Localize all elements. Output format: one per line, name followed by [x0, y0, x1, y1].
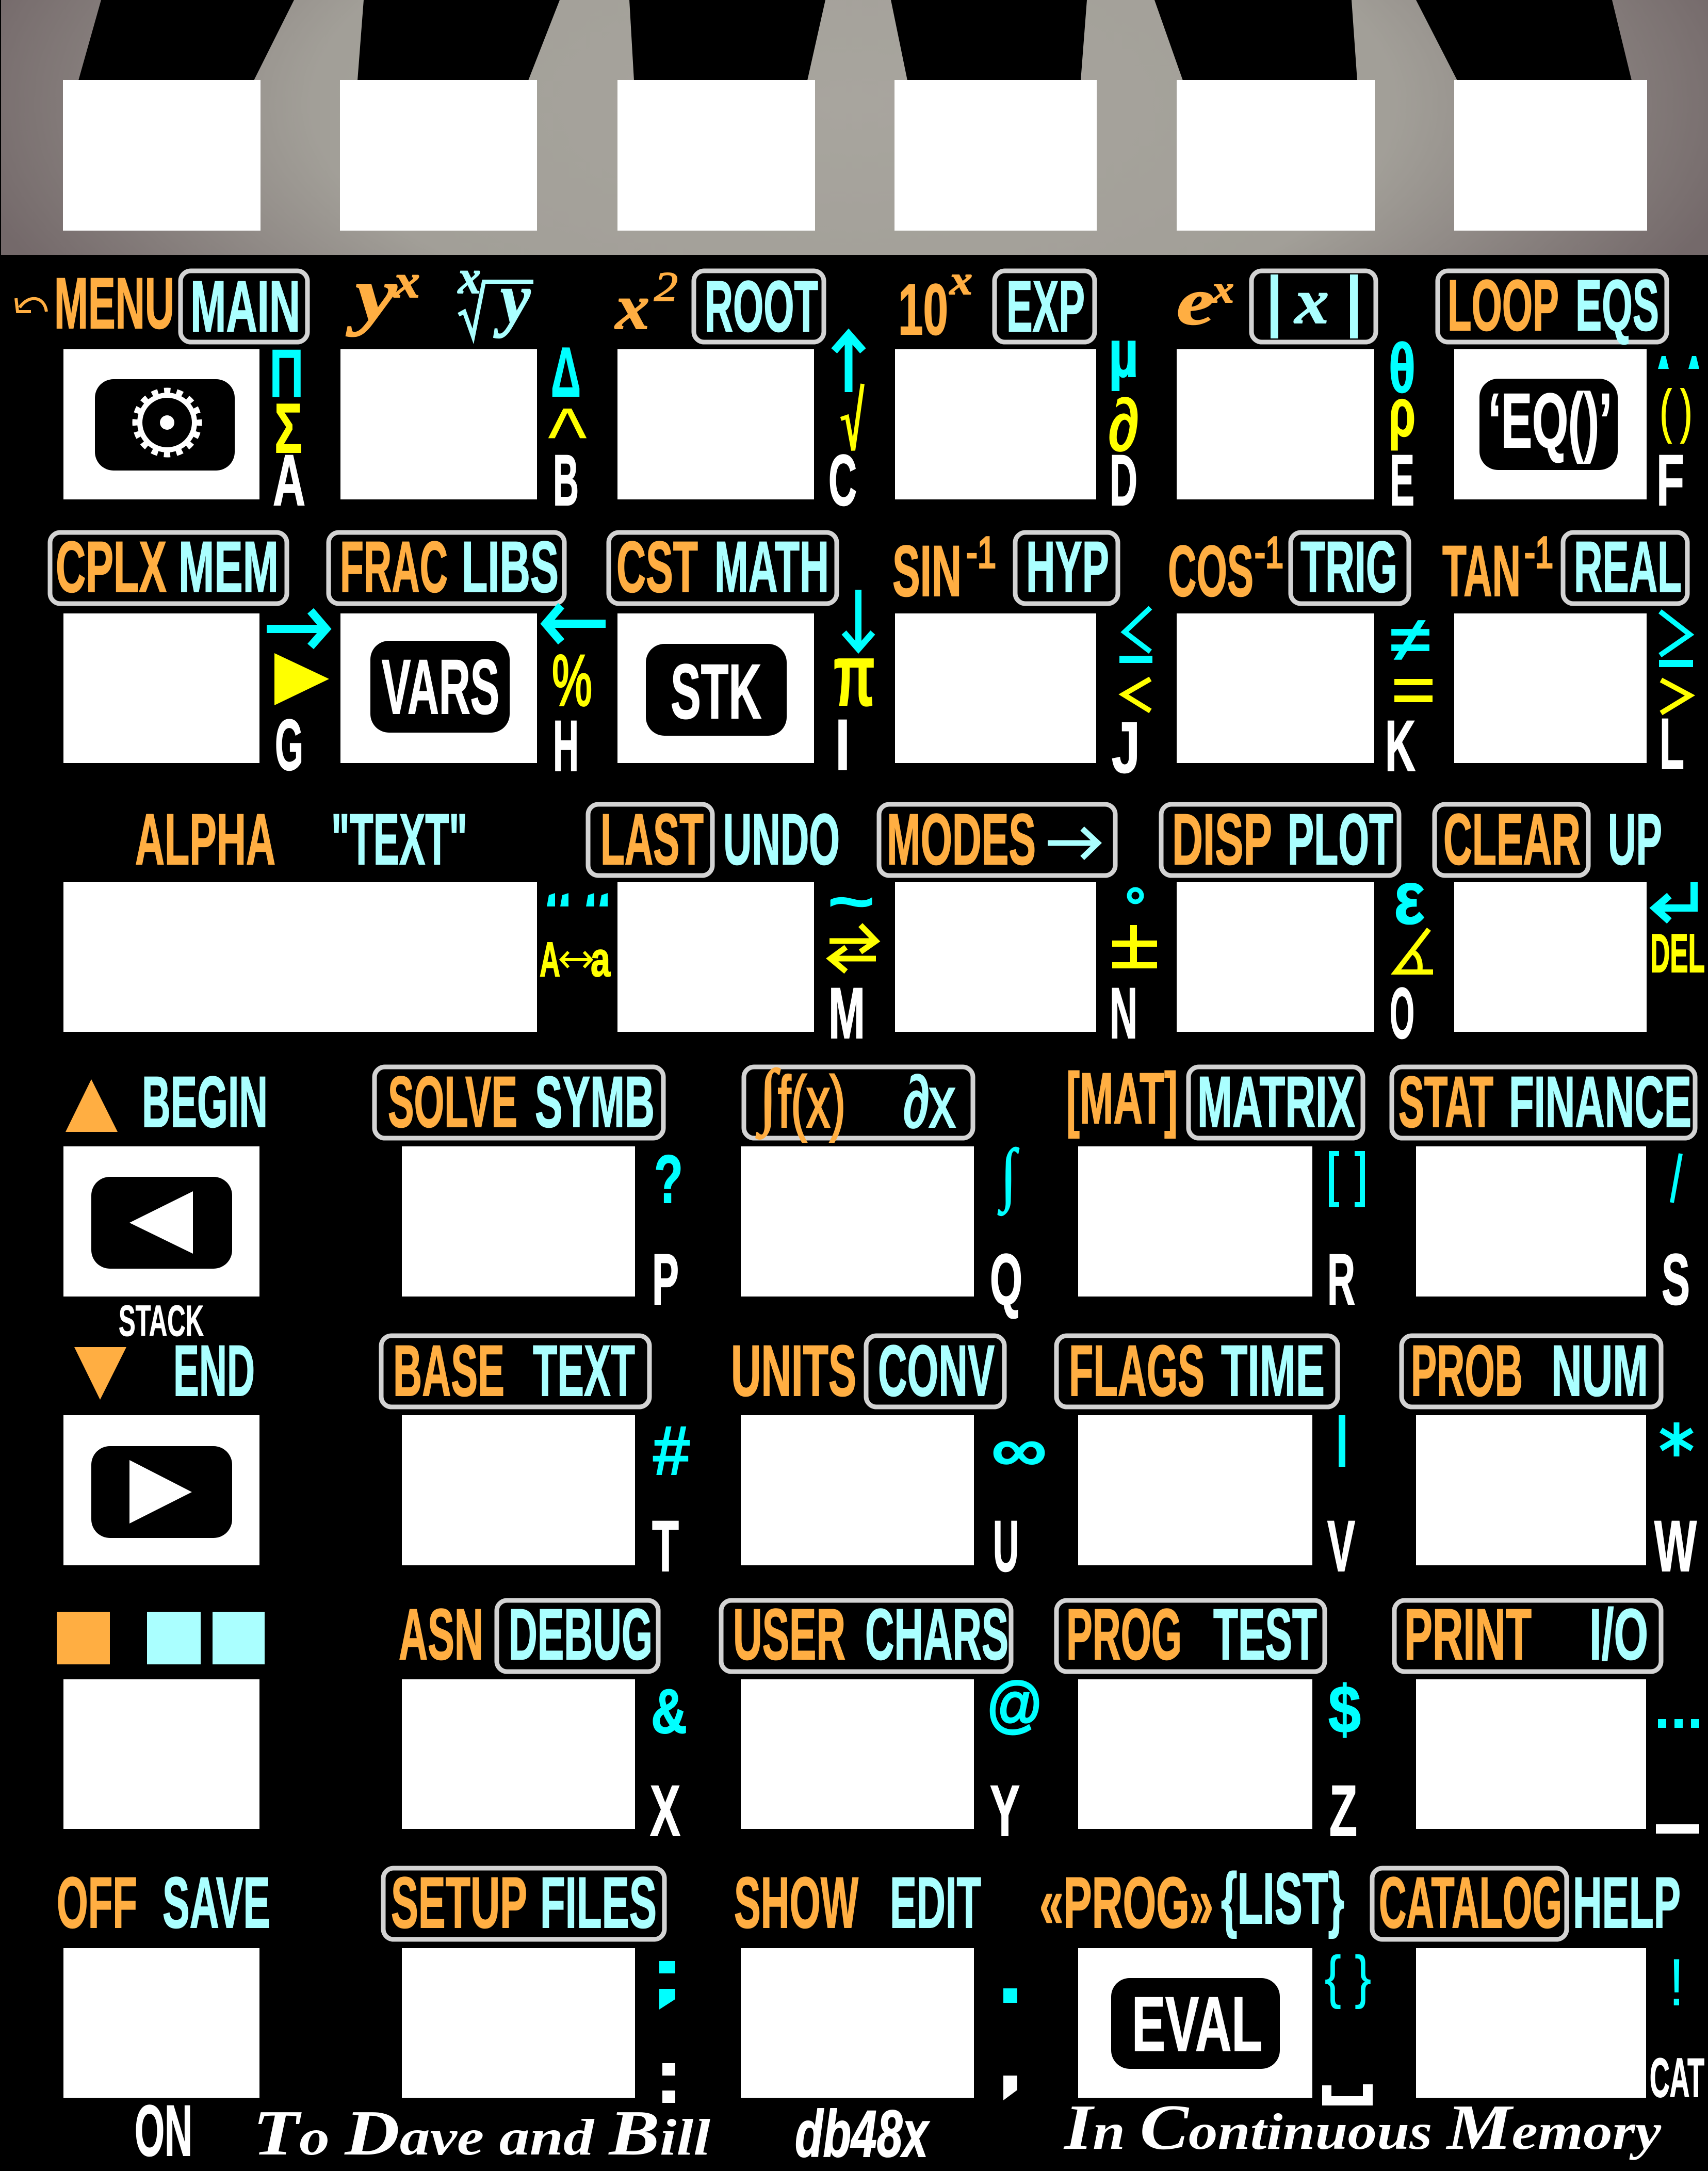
white alpha letters: O	[1390, 973, 1414, 1054]
label box: MODES arrow: MODES	[887, 799, 1036, 880]
label: UNDO: UNDO	[723, 799, 840, 880]
label: e to the x: x	[1212, 268, 1234, 311]
glyph: underscore	[1656, 1824, 1699, 1834]
white alpha letters: X	[650, 1770, 680, 1851]
row 1 labels	[16, 251, 1667, 350]
label: xth root of y: x	[457, 251, 481, 303]
label box: DEBUG: DEBUG	[509, 1594, 653, 1675]
glyph: period	[1003, 1988, 1017, 2003]
label box: TRIG	[1291, 526, 1409, 607]
icon: swap arrows	[829, 925, 876, 971]
white alpha letters: L	[1660, 703, 1684, 784]
label box: SETUP FILES: FILES	[540, 1862, 657, 1943]
label box: DEBUG	[497, 1594, 658, 1675]
glyph: space	[1322, 2084, 1373, 2105]
glyph: exclamation: !	[1669, 1945, 1684, 2020]
key: STK: STK	[671, 648, 761, 735]
glyph: plus minus	[1112, 925, 1157, 968]
label box: MATRIX	[1189, 1061, 1363, 1142]
symbols column A to F	[269, 316, 1699, 483]
label box: LOOP EQS: LOOP	[1447, 265, 1559, 346]
row 2 labels	[50, 526, 1687, 611]
symbols bottom row	[659, 1945, 1704, 2109]
label box: CATALOG	[1372, 1862, 1567, 1943]
label: EDIT: EDIT	[890, 1862, 981, 1943]
label: y to the x	[346, 251, 420, 337]
row 3 labels	[135, 799, 1662, 880]
label box: integral and derivative: f(x)	[778, 1061, 845, 1142]
label box: USER CHARS	[721, 1594, 1011, 1675]
icon: yellow play	[274, 653, 329, 705]
label box: MAIN	[181, 266, 307, 347]
label: y to the x: y	[346, 251, 398, 337]
label box: absolute x: x	[1294, 266, 1329, 337]
label box: absolute x	[1251, 266, 1376, 342]
label box: CST MATH: MATH	[714, 526, 829, 607]
glyph: less or equal	[1119, 608, 1152, 663]
label: [MAT]: [MAT]	[1066, 1058, 1178, 1139]
label box: CLEAR	[1435, 799, 1588, 880]
label box: CONV	[866, 1330, 1004, 1411]
white alpha letters: I	[835, 704, 850, 785]
label: A to a: a	[591, 932, 611, 987]
label: COS inverse: -1	[1255, 528, 1283, 577]
label box: STAT FINANCE: STAT	[1398, 1061, 1493, 1142]
label box: MATRIX: MATRIX	[1197, 1061, 1355, 1142]
label: PROG brackets: «PROG»	[1039, 1862, 1213, 1943]
label: 10 to the x: x	[949, 258, 972, 303]
glyph: slash	[1672, 1154, 1681, 1203]
glyph: equals	[1394, 679, 1433, 702]
panel: top softkey bezel	[1, 0, 1708, 255]
label box: PRINT I/O: PRINT	[1404, 1594, 1532, 1675]
label: MENU: MENU	[54, 263, 174, 344]
label: UP: UP	[1608, 799, 1662, 880]
label box: BASE TEXT: TEXT	[533, 1330, 635, 1411]
glyph: infinity: ∞	[991, 1418, 1047, 1482]
row 5 labels	[74, 1330, 1661, 1411]
label: y to the x: x	[393, 255, 420, 307]
label: STACK: STACK	[119, 1297, 204, 1345]
glyph: comma	[1003, 2076, 1017, 2100]
label box: LAST: LAST	[600, 799, 704, 880]
key: left arrow	[91, 1177, 232, 1269]
symbols column G to L	[267, 590, 1693, 724]
label box: SOLVE SYMB: SOLVE	[388, 1061, 517, 1142]
key: EQ	[1479, 377, 1618, 470]
white alpha letters: D	[1110, 440, 1137, 521]
glyph: braces: { }	[1325, 1945, 1371, 2009]
white alpha letters: P	[652, 1239, 679, 1320]
label: UNITS: UNITS	[731, 1330, 856, 1411]
dedication: In Continuous Memory: In Continuous Memory	[1063, 2092, 1662, 2163]
label: x squared: x	[614, 272, 649, 343]
label box: STAT FINANCE	[1392, 1061, 1695, 1142]
label box: FLAGS TIME: TIME	[1221, 1330, 1325, 1411]
glyph: rho: ρ	[1389, 375, 1416, 450]
label: e to the x	[1177, 265, 1234, 339]
label box: CLEAR: CLEAR	[1443, 799, 1581, 880]
glyph: colon	[662, 2063, 675, 2103]
glyph: integral: ∫	[998, 1136, 1019, 1216]
label box: SOLVE SYMB: SYMB	[535, 1061, 655, 1142]
glyph: percent: %	[552, 640, 592, 721]
key: STK	[646, 644, 787, 736]
glyph: delta: Δ	[551, 333, 581, 411]
icon: right arrow	[267, 611, 326, 646]
glyph: brackets	[1331, 1154, 1362, 1205]
label box: FLAGS TIME: FLAGS	[1069, 1330, 1205, 1411]
label: x squared	[614, 263, 678, 343]
label: x squared: 2	[654, 263, 678, 310]
label box: CPLX MEM: CPLX	[56, 526, 167, 607]
glyph: sigma: Σ	[274, 389, 302, 467]
icon: enter arrow	[1655, 882, 1694, 921]
label box: MAIN: MAIN	[190, 266, 300, 347]
label box: CPLX MEM: MEM	[178, 526, 279, 607]
glyph: double quote marks	[547, 893, 608, 906]
glyph: at: @	[986, 1670, 1043, 1739]
label: TAN inverse: TAN	[1442, 530, 1521, 611]
label box: PRINT I/O: I/O	[1589, 1594, 1648, 1675]
glyph: greater or equal	[1659, 611, 1693, 667]
white alpha letters	[273, 440, 1697, 1851]
label box: EXP	[995, 266, 1095, 347]
label: A to a	[540, 932, 611, 987]
glyph: mu: µ	[1109, 316, 1138, 391]
label box: integral and derivative: ∂x	[903, 1061, 955, 1142]
glyph: hash: #	[654, 1413, 689, 1488]
white alpha letters: B	[553, 440, 579, 521]
glyph: pi: π	[834, 626, 875, 724]
glyph: greater than	[1661, 680, 1690, 713]
symbols column M to O	[540, 856, 1705, 987]
white alpha letters: V	[1327, 1505, 1355, 1586]
label: END: END	[173, 1330, 255, 1411]
glyph: ampersand: &	[651, 1676, 687, 1746]
white alpha letters: J	[1112, 707, 1140, 788]
white alpha letters: Y	[990, 1770, 1020, 1851]
label box: PROG TEST: TEST	[1213, 1594, 1317, 1675]
label box: integral and derivative	[744, 1056, 973, 1142]
white alpha letters: M	[828, 973, 865, 1054]
label box: USER CHARS: CHARS	[865, 1594, 1008, 1675]
label box: integral and derivative: ∫	[756, 1056, 780, 1139]
icon: gear key	[95, 379, 235, 471]
white alpha letters: C	[828, 440, 857, 521]
icon: shift squares	[57, 1612, 265, 1664]
label box: PROB NUM: PROB	[1411, 1330, 1523, 1411]
icon: down triangle	[74, 1347, 126, 1400]
panel: white keys	[63, 349, 1647, 2098]
white alpha letters: N	[1110, 973, 1137, 1054]
glyph: ellipsis	[1658, 1719, 1699, 1728]
label: xth root of y	[457, 251, 533, 338]
label box: FRAC LIBS: LIBS	[462, 526, 559, 607]
label: COS inverse: COS	[1168, 530, 1254, 611]
label box: ROOT	[694, 266, 824, 347]
white alpha letters: A	[273, 440, 305, 521]
label: e to the x: e	[1177, 265, 1214, 339]
label: LIST braces: {LIST}	[1221, 1858, 1344, 1939]
label: A to a: A	[540, 932, 560, 987]
label: 10 to the x: 10	[898, 269, 948, 350]
label: SIN inverse: -1	[966, 528, 996, 577]
white alpha letters: E	[1390, 440, 1414, 521]
label box: EXP: EXP	[1006, 266, 1085, 347]
label: SIN inverse: SIN	[892, 530, 962, 611]
white alpha letters: T	[652, 1505, 679, 1586]
glyph: caret: ^	[548, 391, 587, 483]
row 7 labels	[57, 1858, 1681, 1943]
key: right arrow	[91, 1446, 232, 1538]
glyph: epsilon: ε	[1394, 856, 1425, 939]
row 4 labels	[66, 1056, 1695, 1142]
label: TAN inverse: -1	[1524, 528, 1553, 577]
label box: CST MATH	[609, 526, 837, 607]
glyph: less than	[1124, 679, 1150, 711]
icon: down arrow	[844, 590, 873, 649]
logo: db48x: db48x	[795, 2097, 930, 2171]
symbols column P to W	[651, 1136, 1699, 1834]
glyph: not equal: ≠	[1390, 605, 1430, 674]
label box: CONV: CONV	[878, 1330, 995, 1411]
label box: LAST	[588, 799, 712, 880]
key: EVAL: EVAL	[1132, 1981, 1262, 2067]
label: OFF: OFF	[57, 1862, 137, 1943]
label: ON: ON	[135, 2090, 192, 2171]
white alpha letters: Q	[990, 1239, 1022, 1320]
dedication: To Dave and Bill: To Dave and Bill	[253, 2098, 710, 2169]
label: ALPHA: ALPHA	[135, 799, 275, 880]
glyph: tick marks	[1658, 356, 1699, 369]
glyph: degree	[1129, 889, 1142, 902]
white alpha letters: G	[275, 704, 303, 785]
label: xth root of y: y	[493, 258, 531, 338]
icon: up triangle	[66, 1079, 118, 1132]
label: ASN: ASN	[399, 1594, 483, 1675]
white alpha letters: K	[1385, 705, 1416, 786]
glyph: dollar: $	[1328, 1672, 1361, 1747]
label: SAVE: SAVE	[162, 1862, 270, 1943]
label box: DISP PLOT: DISP	[1172, 799, 1272, 880]
white alpha letters: U	[993, 1505, 1019, 1586]
key: VARS: VARS	[382, 643, 499, 730]
icon: up arrow	[834, 334, 863, 392]
key: VARS	[370, 641, 510, 733]
glyph: pi upper: Π	[269, 335, 304, 412]
glyph: square root	[841, 384, 863, 450]
white alpha letters: H	[553, 705, 579, 786]
label: "TEXT": "TEXT"	[331, 799, 467, 880]
white alpha letters: F	[1656, 440, 1684, 521]
row 6 labels	[57, 1594, 1661, 1675]
glyph: tilde: ~	[828, 870, 874, 933]
glyph: angle	[1396, 929, 1433, 972]
label box: HYP	[1015, 526, 1118, 607]
white alpha letters: R	[1327, 1239, 1355, 1320]
label box: USER CHARS: USER	[733, 1594, 845, 1675]
key: EQ: ‘EQ()’	[1488, 377, 1612, 464]
label box: BASE TEXT: BASE	[393, 1330, 505, 1411]
label box: FRAC LIBS: FRAC	[340, 526, 448, 607]
icon: undo arrow	[16, 298, 46, 312]
glyph: partial: ∂	[1109, 384, 1138, 465]
label box: SETUP FILES: SETUP	[391, 1862, 527, 1943]
label: BEGIN: BEGIN	[142, 1061, 268, 1142]
white alpha letters: Z	[1329, 1770, 1357, 1851]
icon: left arrow	[546, 606, 606, 642]
label box: ROOT: ROOT	[705, 266, 818, 347]
label box: TRIG: TRIG	[1300, 526, 1397, 607]
key: EVAL	[1111, 1978, 1280, 2069]
label: SHOW: SHOW	[734, 1862, 858, 1943]
label box: DISP PLOT: PLOT	[1288, 799, 1393, 880]
label box: CST MATH: CST	[616, 526, 698, 607]
glyph: theta: θ	[1389, 329, 1416, 407]
glyph: pipe	[1339, 1415, 1345, 1467]
glyph: semicolon	[659, 1961, 675, 2010]
label box: PROG TEST: PROG	[1066, 1594, 1182, 1675]
glyph: asterisk	[1661, 1422, 1692, 1456]
label box: HYP: HYP	[1026, 526, 1109, 607]
glyph: question: ?	[654, 1141, 683, 1217]
